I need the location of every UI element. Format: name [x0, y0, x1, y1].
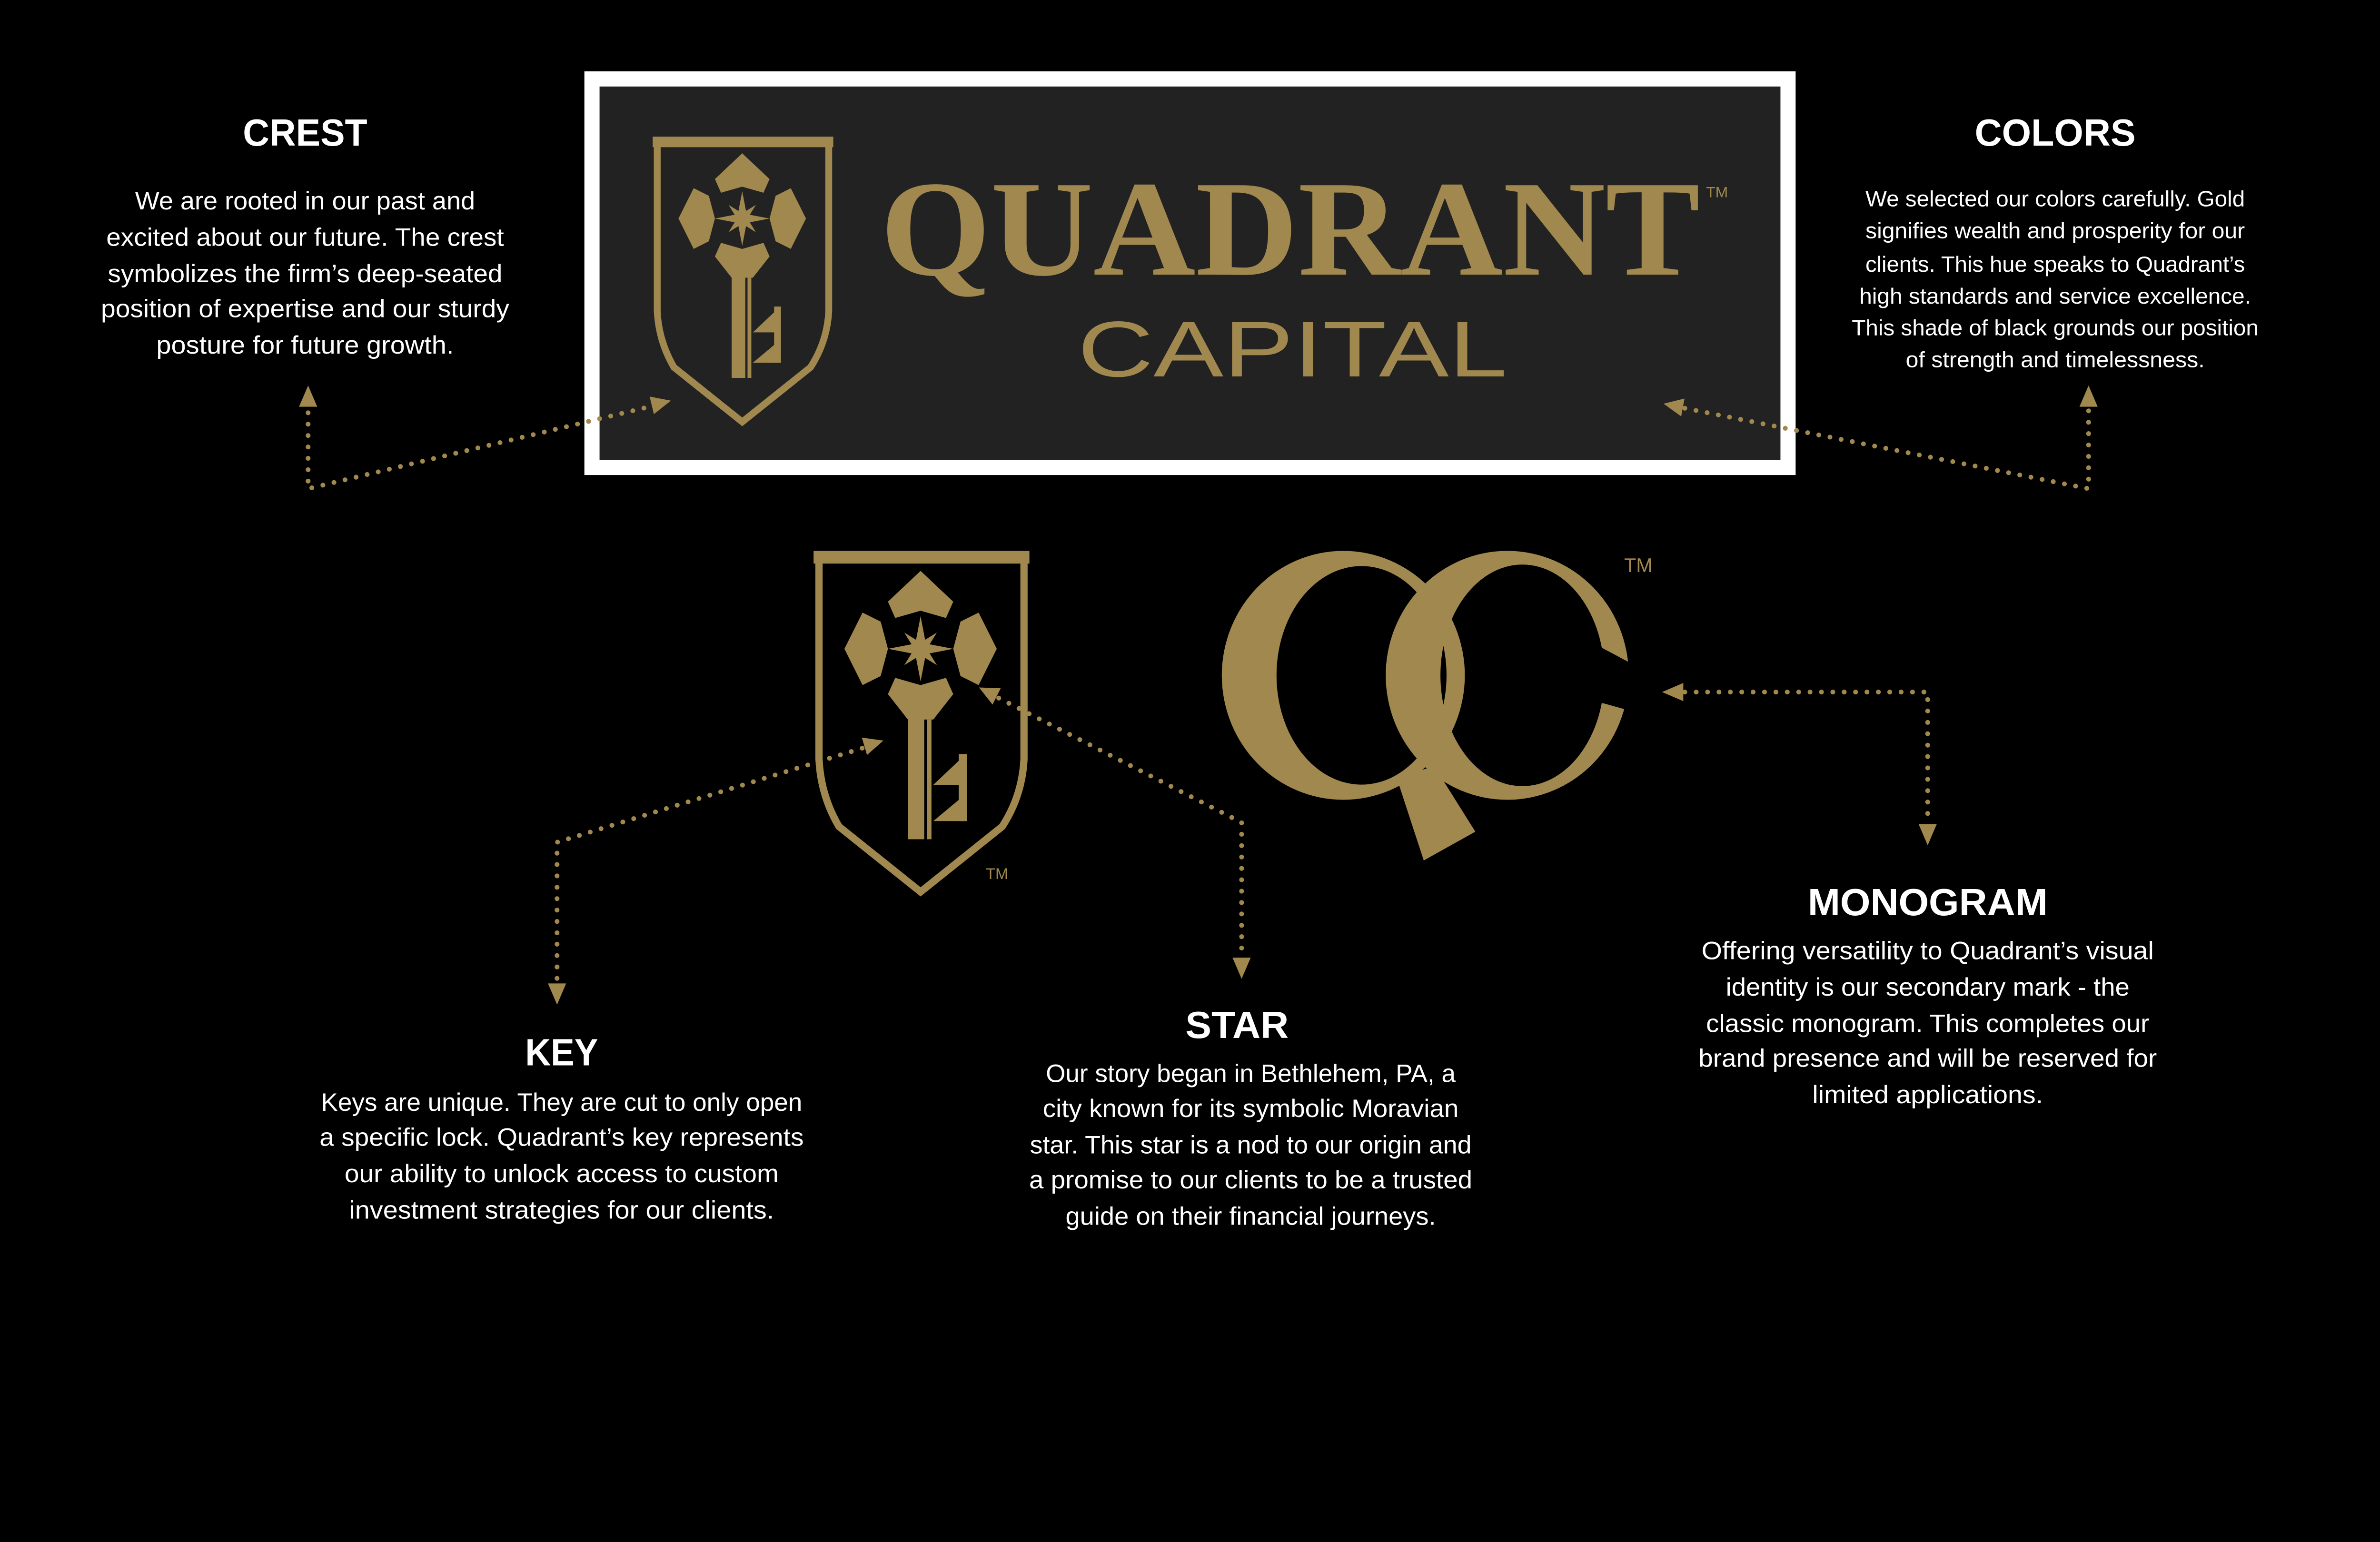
- text block: monogram: [1698, 881, 2157, 1109]
- wordmark: CAPITAL: CAPITAL: [1078, 306, 1507, 394]
- heading: MONOGRAM: MONOGRAM: [1808, 881, 2048, 923]
- text block: key: investment strategies for our clients.: [349, 1196, 774, 1225]
- text block: crest: excited about our future. The crest: [106, 224, 504, 252]
- text block: monogram: Offering versatility to Quadrant’s visual: [1702, 937, 2154, 965]
- text block: key: [319, 1031, 803, 1225]
- text block: colors: [1852, 111, 2259, 372]
- text block: colors: clients. This hue speaks to Quadrant’s: [1865, 252, 2245, 277]
- arrow: crest connector: [299, 386, 671, 489]
- text block: monogram: identity is our secondary mark - the: [1726, 973, 2130, 1001]
- icon: standalone crest: TM: [986, 865, 1008, 882]
- text block: crest: position of expertise and our sturdy: [101, 295, 510, 323]
- text block: key: Keys are unique. They are cut to only open: [321, 1088, 802, 1117]
- text block: key: a specific lock. Quadrant’s key represents: [319, 1124, 803, 1152]
- heading: COLORS: COLORS: [1975, 111, 2136, 154]
- text block: star: [1029, 1004, 1472, 1230]
- text block: crest: [101, 111, 510, 359]
- icon: QC monogram: [1222, 551, 1653, 860]
- text block: crest: posture for future growth.: [156, 331, 454, 359]
- text block: monogram: limited applications.: [1812, 1081, 2043, 1109]
- text block: star: city known for its symbolic Moravian: [1043, 1095, 1458, 1123]
- logo panel: Quadrant Capital: [592, 79, 1788, 467]
- text block: colors: This shade of black grounds our position: [1852, 316, 2259, 340]
- trademark: TM: [1706, 184, 1728, 201]
- text block: crest: We are rooted in our past and: [135, 187, 475, 215]
- text block: crest: symbolizes the firm’s deep-seated: [108, 260, 502, 288]
- heading: CREST: CREST: [243, 111, 367, 154]
- arrow: star connector: [979, 688, 1251, 979]
- icon: QC monogram: TM: [1624, 554, 1653, 576]
- text block: star: guide on their financial journeys.: [1066, 1202, 1436, 1230]
- arrow: colors connector: [1664, 386, 2098, 489]
- arrow: key connector: [548, 738, 883, 1005]
- text block: colors: high standards and service excellence.: [1859, 284, 2251, 308]
- text block: monogram: classic monogram. This completes our: [1706, 1009, 2149, 1038]
- text block: star: Our story began in Bethlehem, PA, a: [1046, 1060, 1456, 1088]
- arrow: monogram connector: [1662, 683, 1937, 845]
- text block: colors: of strength and timelessness.: [1906, 347, 2205, 372]
- heading: STAR: STAR: [1185, 1004, 1289, 1046]
- heading: KEY: KEY: [525, 1031, 598, 1074]
- text block: key: our ability to unlock access to custom: [345, 1160, 779, 1188]
- text block: star: star. This star is a nod to our origin and: [1030, 1131, 1472, 1159]
- text block: star: a promise to our clients to be a trusted: [1029, 1166, 1472, 1194]
- text block: colors: We selected our colors carefully. Gold: [1865, 187, 2245, 211]
- text block: monogram: brand presence and will be reserved for: [1698, 1045, 2157, 1073]
- icon: crest in logo: [653, 137, 833, 422]
- icon: standalone crest: [813, 551, 1030, 892]
- wordmark: QUADRANT: QUADRANT: [880, 153, 1700, 305]
- text block: colors: signifies wealth and prosperity for our: [1865, 218, 2245, 243]
